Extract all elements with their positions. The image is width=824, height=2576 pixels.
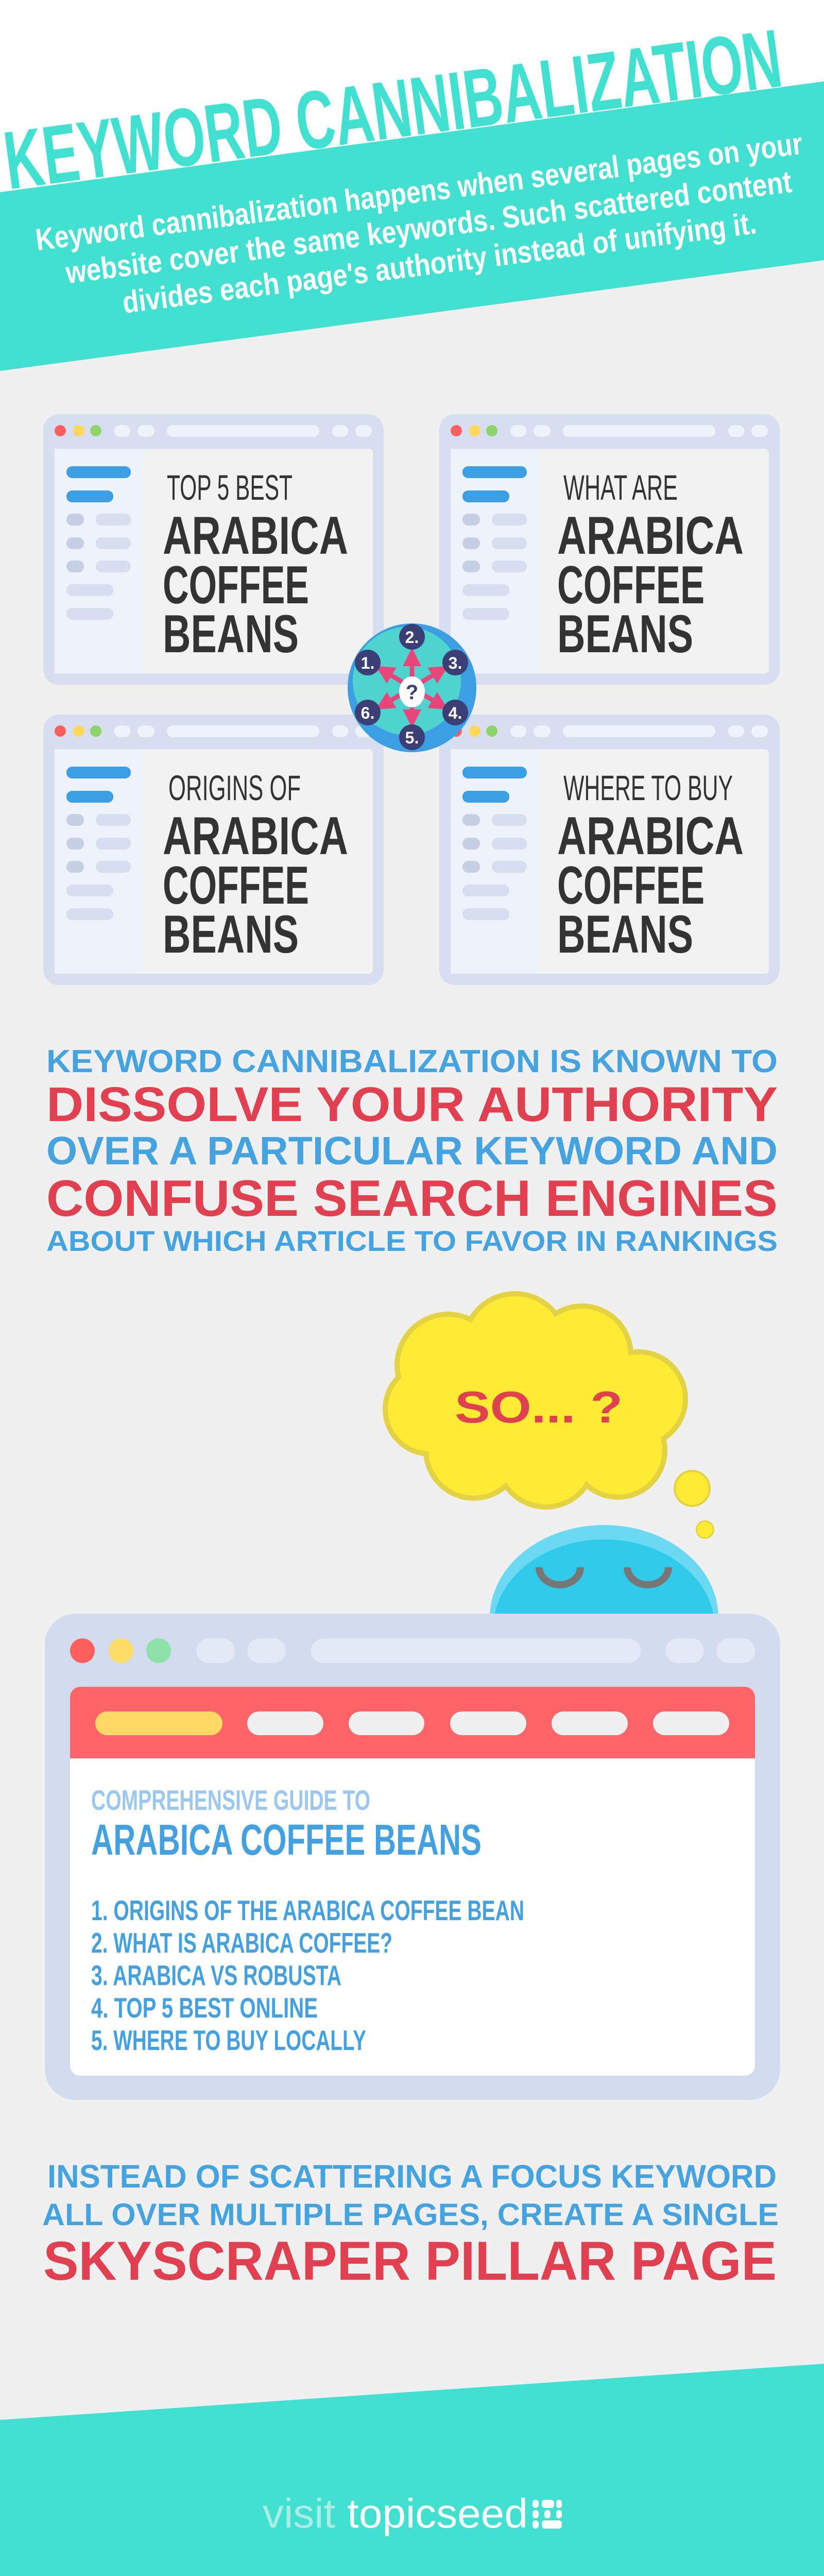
statement text: DISSOLVE YOUR AUTHORITY	[46, 1077, 778, 1132]
footer brand: visit topicseed	[263, 2490, 528, 2536]
conclusion text: INSTEAD OF SCATTERING A FOCUS KEYWORD	[47, 2159, 777, 2195]
conclusion text: ALL OVER MULTIPLE PAGES, CREATE A SINGLE	[42, 2197, 779, 2232]
conclusion text	[42, 2159, 779, 2292]
guide heading	[91, 1784, 482, 1864]
icon: confusion wheel: 1.	[361, 654, 374, 672]
guide list: 3. ARABICA VS ROBUSTA	[91, 1959, 341, 1991]
panel: browser window 2: COFFEE	[557, 555, 705, 615]
guide list: 5. WHERE TO BUY LOCALLY	[91, 2024, 366, 2056]
icon: confusion wheel: 2.	[405, 628, 419, 647]
guide list: 4. TOP 5 BEST ONLINE	[91, 1992, 318, 2024]
panel: browser window 1	[43, 414, 384, 685]
panel: browser window 3: BEANS	[163, 905, 299, 964]
statement text: ABOUT WHICH ARTICLE TO FAVOR IN RANKINGS	[46, 1225, 778, 1257]
statement text: CONFUSE SEARCH ENGINES	[46, 1170, 778, 1227]
panel: browser window 3	[43, 715, 384, 985]
footer band	[0, 2364, 824, 2576]
icon: confusion wheel: ?	[406, 681, 418, 704]
panel: browser window 4: COFFEE	[557, 856, 705, 916]
conclusion text: SKYSCRAPER PILLAR PAGE	[43, 2230, 777, 2292]
thought cloud	[383, 1291, 714, 1539]
icon: confusion wheel: 6.	[361, 704, 374, 722]
panel: browser window 4: BEANS	[557, 905, 693, 964]
panel: pillar page window	[45, 1614, 780, 2100]
guide list	[91, 1894, 524, 2056]
icon: confusion wheel: 5.	[405, 728, 419, 747]
panel: browser window 1: BEANS	[163, 604, 299, 664]
panel: browser window 1: COFFEE	[163, 555, 309, 615]
icon: logo dots	[533, 2500, 562, 2529]
panel: browser window 2: BEANS	[557, 604, 693, 664]
guide list: 1. ORIGINS OF THE ARABICA COFFEE BEAN	[91, 1894, 524, 1926]
statement text: OVER A PARTICULAR KEYWORD AND	[46, 1129, 778, 1173]
panel: browser window 3: ORIGINS OF	[168, 768, 301, 808]
guide heading: COMPREHENSIVE GUIDE TO	[91, 1784, 370, 1816]
intro text	[33, 126, 814, 330]
character: sleepy blob	[490, 1525, 718, 1717]
panel: browser window 2: WHAT ARE	[563, 468, 678, 507]
icon: confusion wheel: 3.	[449, 654, 462, 672]
header band	[0, 12, 824, 371]
panel: browser window 4	[439, 715, 780, 985]
panel: browser window 2: ARABICA	[557, 506, 744, 566]
statement text: KEYWORD CANNIBALIZATION IS KNOWN TO	[46, 1044, 778, 1079]
panel: browser window 1: TOP 5 BEST	[167, 468, 293, 507]
panel: browser window 3: COFFEE	[163, 856, 309, 916]
icon: confusion wheel	[348, 623, 476, 752]
panel: browser window 1: ARABICA	[163, 506, 348, 566]
guide list: 2. WHAT IS ARABICA COFFEE?	[91, 1927, 392, 1959]
panel: browser window 2	[439, 414, 780, 685]
statement text	[46, 1044, 778, 1257]
cloud text: SO... ?	[455, 1383, 623, 1432]
panel: browser window 3: ARABICA	[163, 806, 348, 866]
guide heading: ARABICA COFFEE BEANS	[91, 1816, 482, 1864]
icon: confusion wheel: 4.	[449, 704, 462, 722]
panel: browser window 4: ARABICA	[557, 806, 744, 866]
